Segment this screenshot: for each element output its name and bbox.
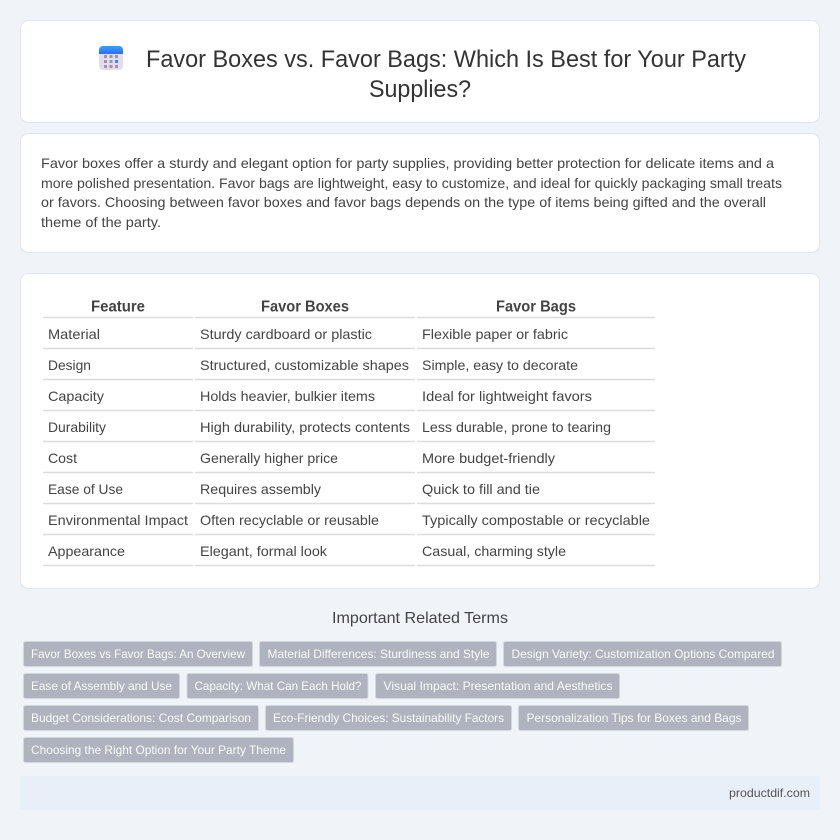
table header: Favor Boxes [261, 298, 349, 316]
table row: cost [48, 450, 555, 466]
table row: capacity [48, 388, 592, 404]
table row: appearance: Casual, charming style [422, 543, 566, 559]
table row: durability: Less durable, prone to tearing [422, 419, 611, 435]
tag: Favor Boxes vs Favor Bags: An Overview [31, 647, 245, 661]
table row: cost: Cost [48, 450, 77, 466]
table row: cost: More budget-friendly [422, 450, 555, 466]
table row: design: Design [48, 357, 91, 373]
footer: productdif.com [729, 786, 810, 800]
table header: Favor Bags [496, 298, 576, 316]
table header: Feature [91, 298, 145, 316]
table row: capacity: Ideal for lightweight favors [422, 388, 592, 404]
table row: environmental impact: Often recyclable or reusable [200, 512, 379, 528]
tag [266, 706, 512, 730]
table row: ease of use [48, 481, 540, 497]
table row: material [48, 326, 568, 342]
tag [24, 674, 180, 698]
table row: design [48, 357, 578, 373]
tag [504, 642, 782, 666]
tag [24, 642, 252, 666]
table row: material: Sturdy cardboard or plastic [200, 326, 372, 342]
table row: environmental impact: Typically compostable or recyclable [422, 512, 650, 528]
table row: environmental impact: Environmental Impact [48, 512, 188, 528]
panel: intro text [20, 134, 820, 252]
table row: cost: Generally higher price [200, 450, 338, 466]
tag [24, 706, 258, 730]
tag [260, 642, 496, 666]
tag: Eco-Friendly Choices: Sustainability Factors [273, 711, 504, 725]
table row: durability [48, 419, 611, 435]
tag: Capacity: What Can Each Hold? [194, 679, 362, 693]
tag: Visual Impact: Presentation and Aesthetics [384, 679, 612, 693]
tag: Material Differences: Sturdiness and Style [268, 647, 490, 661]
tag [518, 706, 748, 730]
footer [20, 776, 820, 810]
tag list: related terms [24, 642, 782, 762]
tag: Design Variety: Customization Options Compared [512, 647, 774, 661]
table row: durability: Durability [48, 419, 106, 435]
icon: calendar [99, 46, 123, 70]
table row: appearance: Elegant, formal look [200, 543, 328, 559]
table row: environmental impact [48, 512, 650, 528]
table header [91, 298, 576, 316]
panel: header [20, 20, 820, 122]
table row: material: Material [48, 326, 100, 342]
tag [376, 674, 620, 698]
text block: introduction: theme of the party. [41, 214, 161, 230]
table row: capacity: Capacity [48, 388, 104, 404]
table row: appearance: Appearance [48, 543, 125, 559]
table row: material: Flexible paper or fabric [422, 326, 568, 342]
tag: Budget Considerations: Cost Comparison [31, 711, 251, 725]
tag: Choosing the Right Option for Your Party Theme [31, 743, 286, 757]
title: Supplies? [369, 76, 471, 103]
text block: introduction: more polished presentation. Favor bags are lightweight, easy to customize, and ideal for quickly packaging small treats [41, 175, 782, 191]
heading: related terms: Important Related Terms [332, 610, 508, 627]
table row: appearance [48, 543, 566, 559]
tag [24, 738, 294, 762]
title: Favor Boxes vs. Favor Bags: Which Is Best for Your Party [146, 46, 746, 73]
title [146, 46, 746, 103]
table row: durability: High durability, protects contents [200, 419, 410, 435]
text block: introduction [41, 155, 782, 230]
table row: ease of use: Quick to fill and tie [422, 481, 540, 497]
panel: comparison table [20, 274, 820, 588]
tag: Ease of Assembly and Use [31, 679, 172, 693]
tag: Personalization Tips for Boxes and Bags [526, 711, 742, 725]
text block: introduction: or favors. Choosing between favor boxes and favor bags depends on the type of items being gifted and the overall [41, 194, 766, 210]
table row: design: Simple, easy to decorate [422, 357, 578, 373]
tag [187, 674, 368, 698]
table row: ease of use: Ease of Use [48, 481, 123, 497]
table row: capacity: Holds heavier, bulkier items [200, 388, 375, 404]
table row: design: Structured, customizable shapes [200, 357, 409, 373]
table row: ease of use: Requires assembly [200, 481, 321, 497]
text block: introduction: Favor boxes offer a sturdy and elegant option for party supplies, providing better protection for delicate items and a [41, 155, 774, 171]
